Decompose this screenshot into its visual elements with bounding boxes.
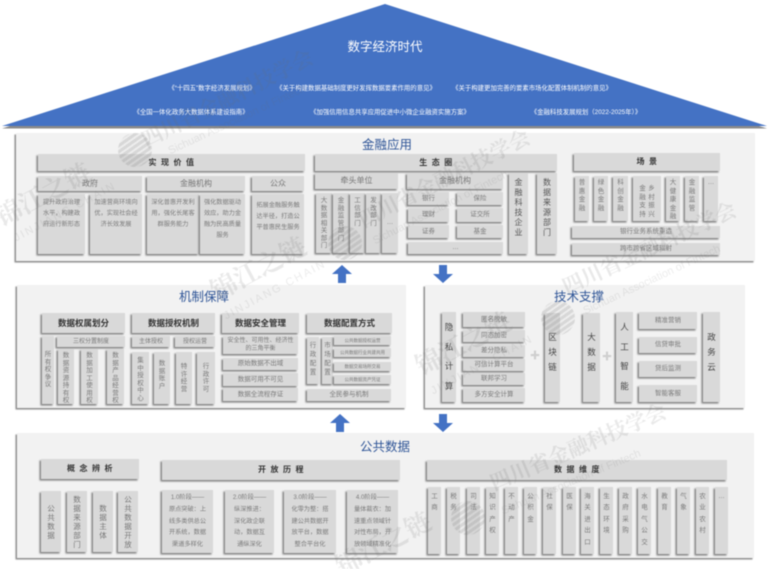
header: ecosystem institutions — [407, 173, 503, 189]
stage 2.0: 深化政企联 — [234, 518, 265, 525]
column: agriculture: 农业农村 — [699, 493, 706, 534]
stage 3.0: 建公共数据开 — [291, 518, 329, 525]
column: business — [428, 487, 441, 554]
column: health finance — [666, 176, 680, 221]
item: securities: 证券 — [422, 228, 435, 234]
text box: government value 2 — [90, 194, 142, 254]
stage 4.0: 量体裁衣：加 — [354, 506, 391, 513]
column: utilities: 水电气公交 — [641, 493, 648, 546]
item: authorized operation — [334, 336, 391, 345]
item: securities — [408, 225, 449, 238]
column: ownership dispute: 所有权争议 — [45, 351, 51, 388]
item: smart service: 智能客服 — [655, 390, 681, 396]
text box: public value: 拓展金融服务触达半径，打造公平普惠民生服务 — [256, 202, 300, 231]
column: processing right — [81, 349, 98, 404]
policy text: data foundation: 《关于构建数据基础制度更好发挥数据要素作用的意见》 — [276, 85, 436, 92]
header: ecosystem — [315, 154, 557, 171]
column: artificial intelligence: 人工智能 — [620, 322, 629, 390]
column: data source departments — [537, 173, 557, 254]
column: product right — [107, 349, 124, 404]
item: multiparty computation — [463, 388, 525, 402]
policy text: fintech plan: 《金融科技发展规划（2022-2025年）》 — [531, 109, 641, 116]
stage 1.0: 渠道多样化 — [172, 541, 203, 548]
column: financial regulators: 金融监管部门 — [338, 197, 344, 242]
column: environment — [600, 487, 613, 554]
column: industry departments: 工信部门 — [354, 197, 361, 226]
header: lead units: 牵头单位 — [340, 176, 372, 185]
header: ecosystem: 生态圈 — [419, 158, 457, 166]
item: asset certificate — [334, 375, 391, 384]
column: education — [658, 487, 671, 554]
column: blockchain: 区块链 — [548, 332, 557, 372]
column: utilities — [638, 487, 651, 554]
column: others: … — [387, 219, 393, 226]
column: rural revitalization: 金融支持 — [639, 185, 646, 218]
stage 2.0 — [225, 490, 274, 553]
item: credit review: 信贷审批 — [655, 341, 681, 348]
item: wealth: 理财 — [422, 211, 435, 218]
column: permit: 行政许可 — [203, 363, 209, 392]
column: privacy computing: 隐私计算 — [445, 322, 453, 390]
header: data authorization: 数据授权机制 — [148, 318, 199, 328]
column: financial regulation: 金融监管 — [689, 179, 695, 212]
policy text: factor market: 《关于构建更加完善的要素市场化配置体制机制的意见》 — [452, 85, 612, 92]
stage 4.0: 对性布局，开 — [354, 529, 391, 536]
column: franchise — [176, 352, 192, 404]
watermarks: 锦江之链 — [411, 307, 516, 381]
column: public data: 公共数据 — [47, 504, 55, 540]
stage 2.0: 动，数据互 — [234, 529, 265, 536]
column: blockchain — [545, 313, 560, 402]
box: raw data stays: 原始数据不出域 — [238, 360, 283, 367]
item: precision marketing: 精准营销 — [655, 316, 681, 324]
item: smart service — [639, 385, 697, 402]
heading: financial applications: 金融应用 — [362, 138, 412, 152]
triangle: digital economy era — [2, 3, 767, 130]
column: government cloud — [703, 312, 720, 402]
column: weather — [677, 487, 690, 554]
item: asset certificate: 公共数据资产凭证 — [344, 376, 380, 382]
icon: plus between blockchain and big data: ✚ — [530, 351, 540, 362]
bar: universal participation: 全民参与机制 — [330, 391, 368, 398]
stage 4.0: 速重点领域针 — [354, 518, 391, 525]
column: data subject: 数据主体 — [99, 504, 107, 540]
column: justice: 司法 — [470, 493, 477, 511]
item: multiparty computation: 多方安全计算 — [474, 391, 514, 398]
item: insurance: 保险 — [474, 194, 486, 202]
watermarks: Sichuan Association of Fintech — [582, 243, 722, 317]
column: administrative allocation: 行政配置 — [310, 342, 316, 376]
item: insurance — [457, 192, 503, 205]
arrow: up to mechanism — [330, 414, 350, 433]
watermarks: JINJIANG CHAIN — [12, 180, 118, 244]
column: customs — [581, 487, 594, 554]
column: big data departments: 大数据相关部门 — [321, 197, 327, 249]
stage 3.0 — [284, 490, 336, 553]
arrow: down to public data — [432, 413, 454, 432]
item: bank — [408, 192, 449, 205]
header: open process — [162, 460, 400, 480]
box: process evidence — [223, 388, 298, 401]
column: government cloud: 政务云 — [707, 332, 716, 372]
item: others: … — [452, 244, 459, 251]
header: data allocation: 数据配置方式 — [324, 318, 375, 328]
item: differential privacy — [463, 345, 525, 357]
bar: authorized operation — [175, 336, 215, 347]
watermarks: 四川省金融科技学会 — [355, 125, 534, 232]
column: social insurance — [543, 487, 556, 554]
header: public: 公众 — [270, 178, 286, 188]
column: reform departments — [366, 193, 381, 253]
column: privacy computing — [442, 312, 456, 402]
header: ecosystem institutions: 金融机构 — [439, 176, 471, 185]
item: others — [408, 242, 503, 254]
stage 3.0: 3.0阶段—— — [293, 494, 327, 501]
watermarks: Sichuan Association of Fintech — [500, 447, 643, 517]
box: usable not visible: 数据可用不可见 — [238, 376, 283, 382]
item: federated learning: 联邦学习 — [481, 375, 507, 382]
header: data dimensions: 数据维度 — [554, 465, 604, 474]
column: housing fund — [524, 487, 537, 554]
bar: bank system rebuild — [572, 226, 720, 238]
column: industry departments — [350, 193, 365, 253]
text box: institution value 2 — [200, 194, 245, 254]
bar: cross region: 跨市跨省区域辐射 — [620, 245, 672, 252]
column: business: 工商 — [431, 493, 438, 511]
stage 3.0: 整合平台化 — [295, 541, 325, 548]
watermarks: 四川省金融科技学会 — [559, 198, 740, 299]
icon: plus between big data and AI: ✚ — [602, 352, 612, 363]
column: environment: 生态环境 — [603, 493, 610, 534]
item: fund — [457, 225, 503, 238]
column: data account: 数据账户 — [159, 360, 165, 390]
column: others — [704, 176, 718, 221]
column: open data — [118, 491, 138, 552]
column: procurement: 政府采购 — [622, 493, 629, 534]
stage 4.0 — [347, 490, 398, 553]
bar: authorized operation: 授权运营 — [183, 338, 207, 344]
bar: subject authorization: 主体授权 — [139, 338, 163, 344]
box: raw data stays — [223, 358, 298, 370]
column: agriculture — [696, 487, 709, 554]
arrow: down to technology — [432, 264, 454, 284]
column: medical insurance — [563, 487, 576, 554]
text box: government value 1: 提升政府治理水平，构建政府运行新形态 — [43, 199, 80, 228]
text box: institution value 2: 强化数据驱动效应，助力金融为民高质量服务 — [204, 199, 241, 239]
column: open data: 公共数据开放 — [124, 494, 132, 548]
column: green finance — [594, 176, 608, 221]
item: wealth — [408, 208, 449, 222]
column: data account — [154, 352, 170, 404]
column: justice — [467, 487, 480, 554]
column: fintech companies: 金融科技企业 — [514, 178, 522, 237]
column: market allocation: 市场配置 — [324, 342, 331, 376]
item: post loan: 贷后监测 — [655, 365, 681, 372]
column: data source: 数据来源部门 — [73, 494, 81, 548]
item: fund: 基金 — [474, 228, 486, 234]
item: differential privacy: 差分隐私 — [481, 347, 507, 354]
stage 4.0: 放领域精准化 — [354, 541, 391, 548]
column: customs: 海关进出口 — [584, 493, 591, 546]
stage 2.0: 2.0阶段—— — [233, 494, 266, 501]
item: post loan — [639, 361, 697, 377]
column: ownership dispute — [42, 336, 54, 404]
item: authorized operation: 公共数据授权运营 — [344, 338, 380, 342]
column: big data — [583, 313, 600, 402]
stage 1.0: 开系统，数据 — [169, 529, 206, 536]
column: permit — [197, 352, 215, 404]
column: product right: 数据产品经营权 — [112, 352, 119, 404]
header: value realization — [38, 154, 305, 171]
column: franchise: 特许经营 — [181, 363, 187, 392]
header: government: 政府 — [82, 178, 98, 188]
item: homomorphic encryption — [463, 330, 525, 342]
watermarks: JINJIANG CHAIN — [429, 333, 535, 397]
box: process evidence: 数据全流程存证 — [238, 390, 283, 398]
column: tech finance — [613, 176, 628, 221]
column: administrative allocation — [307, 337, 319, 384]
column: resource holding right: 数据资源持有权 — [63, 352, 69, 404]
panel: financial applications — [16, 133, 755, 261]
stage 1.0: 线多类供总公 — [169, 518, 206, 525]
box: security triangle — [223, 336, 298, 354]
header: data dimensions — [427, 460, 727, 480]
item: industry co-build: 公共数据行业共建共用 — [340, 350, 385, 354]
watermarks: 四川省金融科技学会 — [486, 399, 670, 495]
item: anonymization — [463, 312, 525, 327]
bar: bank system rebuild: 银行业务系统重造 — [620, 228, 672, 235]
text box: institution value 1 — [147, 194, 199, 254]
item: precision marketing — [639, 312, 697, 329]
header: data ownership: 数据权属划分 — [58, 318, 109, 328]
column: artificial intelligence — [616, 312, 633, 402]
header: concepts: 概念辨析 — [67, 464, 117, 473]
column: rural revitalization: 乡村振兴 — [648, 185, 655, 218]
item: bank: 银行 — [422, 194, 435, 202]
box: security triangle: 安全性、可用性、经济性的三角平衡 — [227, 338, 294, 352]
watermarks: Sichuan Association of Fintech — [371, 168, 510, 247]
column: tech finance: 科创金融 — [617, 179, 624, 212]
item: anonymization: 匿名脱敏 — [481, 316, 507, 322]
bar: three rights — [57, 336, 125, 347]
item: industry co-build — [334, 348, 391, 357]
column: real estate — [505, 487, 518, 554]
header: government — [38, 176, 142, 191]
column: intellectual property: 知识产权 — [489, 493, 496, 534]
item: credit review — [639, 337, 697, 353]
column: financial regulation — [685, 176, 699, 221]
column: tax — [447, 487, 460, 554]
column: others: … — [718, 493, 725, 500]
column: green finance: 绿色金融 — [598, 179, 604, 212]
column: financial regulators — [333, 193, 349, 253]
stage 1.0: 1.0阶段—— — [171, 494, 204, 501]
policy text: credit information: 《加强信用信息共享应用促进中小微企业融资实施方案》 — [310, 109, 470, 116]
panel: technical support — [425, 285, 745, 408]
header: financial institutions: 金融机构 — [180, 178, 212, 188]
box: usable not visible — [223, 373, 298, 386]
header: data ownership — [42, 313, 125, 333]
column: rural revitalization — [633, 176, 661, 221]
item: exchange — [457, 208, 503, 222]
bar: cross region — [572, 243, 720, 255]
stage 2.0: 纵深推进： — [234, 506, 265, 513]
panel: mechanism guarantee — [17, 285, 406, 408]
arrow: up to applications — [332, 264, 352, 284]
watermarks: 四川省金融科技学会 — [138, 45, 317, 152]
item: federated learning — [463, 373, 525, 385]
column: housing fund: 公积金 — [527, 493, 534, 523]
column: education: 教育 — [661, 493, 668, 511]
column: others — [382, 193, 398, 253]
header: data allocation — [307, 313, 392, 333]
column: health finance: 大健康金融 — [670, 179, 676, 220]
column: big data: 大数据 — [587, 332, 596, 372]
header: value realization: 实现价值 — [148, 158, 198, 166]
heading: mechanism guarantee: 机制保障 — [179, 290, 229, 304]
column: procurement — [619, 487, 632, 554]
column: others: … — [708, 179, 714, 186]
column: fintech companies — [509, 173, 528, 254]
header: scenarios — [574, 153, 720, 171]
column: intellectual property — [486, 487, 499, 554]
column: central authorization: 集中授权中心 — [137, 357, 144, 402]
text box: institution value 1: 深化普惠开发利用，强化长尾客群服务能力 — [151, 199, 195, 228]
header: financial institutions — [147, 176, 245, 191]
column: real estate: 不动产 — [508, 493, 515, 523]
header: open process: 开放历程 — [258, 465, 308, 474]
column: public data — [41, 491, 61, 552]
item: exchange trading — [334, 362, 391, 371]
text box: public value — [252, 194, 304, 254]
header: data authorization — [132, 313, 215, 333]
panel: public data — [17, 433, 754, 558]
column: central authorization — [132, 352, 149, 404]
bar: three rights: 三权分置制度 — [73, 338, 109, 344]
bar: subject authorization — [132, 336, 170, 347]
header: scenarios: 场景 — [636, 157, 662, 166]
text box: government value 1 — [38, 194, 85, 254]
header: data security — [222, 313, 299, 333]
policy text: government big data: 《全国一体化政务大数据体系建设指南》 — [133, 109, 249, 116]
column: weather: 气象 — [680, 493, 687, 511]
column: inclusive finance: 普惠金融 — [579, 179, 585, 212]
column: data source — [67, 491, 87, 552]
column: data source departments: 数据来源部门 — [543, 178, 551, 237]
item: homomorphic encryption: 同态加密 — [481, 332, 507, 339]
watermarks: 锦江之链 — [206, 232, 311, 306]
column: reform departments: 发改部门 — [370, 197, 377, 226]
item: trusted computing: 可信计算平台 — [474, 361, 514, 368]
stage 1.0 — [162, 490, 213, 553]
heading: technical support: 技术支撑 — [554, 290, 604, 304]
text box: government value 2: 加速营商环境向优，实现社会经济长效发展 — [94, 199, 138, 228]
column: social insurance: 社保 — [546, 493, 553, 511]
stage 1.0: 原点突破：上 — [169, 506, 206, 513]
column: big data departments — [316, 193, 332, 253]
column: inclusive finance — [575, 176, 589, 221]
stage 4.0: 4.0阶段—— — [356, 494, 389, 501]
header: data security: 数据安全管理 — [235, 318, 286, 328]
item: trusted computing — [463, 359, 525, 371]
item: exchange trading: 数据交易场所交易 — [344, 364, 380, 368]
stage 2.0: 通纵深化 — [237, 541, 262, 548]
stage 3.0: 化零为整：搭 — [291, 506, 329, 513]
watermarks: Sichuan Association of Fintech — [167, 83, 307, 157]
watermarks: JINJIANG CHAIN — [222, 258, 328, 322]
bar: universal participation — [307, 389, 391, 401]
item: exchange: 证交所 — [470, 211, 490, 218]
header: public — [252, 176, 304, 191]
column: processing right: 数据加工使用权 — [86, 352, 93, 404]
column: resource holding right — [58, 349, 74, 404]
column: data subject — [93, 491, 113, 552]
header: concepts — [41, 459, 139, 479]
header: lead units — [315, 173, 398, 189]
heading: public data: 公共数据 — [360, 440, 410, 454]
column: others — [715, 487, 728, 554]
stage 3.0: 放平台，数据 — [291, 529, 329, 536]
column: medical insurance: 医保 — [566, 493, 573, 511]
policy text: 十四五 plan: 《“十四五”数字经济发展规划》 — [168, 85, 256, 92]
column: tax: 税务 — [450, 493, 457, 511]
heading: era title: 数字经济时代 — [347, 40, 422, 54]
column: market allocation — [322, 337, 333, 384]
